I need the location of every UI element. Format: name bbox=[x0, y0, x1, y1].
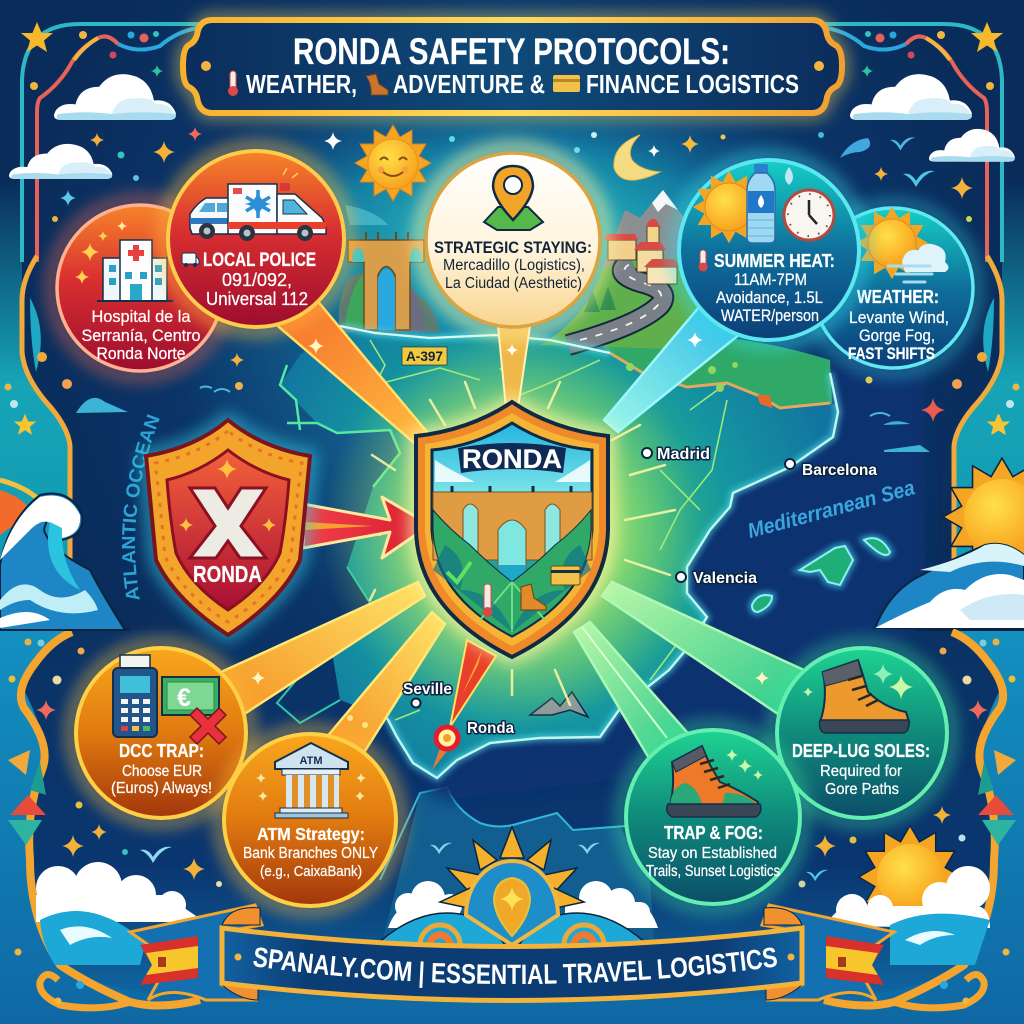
stars and clouds top bbox=[9, 22, 1015, 452]
flag of Spain right bbox=[826, 936, 884, 985]
label: Seville: Seville bbox=[403, 681, 452, 698]
flag of Spain bbox=[140, 936, 198, 985]
text: hospital: Serranía, Centro bbox=[82, 327, 200, 345]
decorative frame: right bbox=[824, 24, 1020, 1008]
panel: summer heat bbox=[675, 156, 863, 344]
map: Balearic islands glow bbox=[752, 538, 890, 612]
title line 1: RONDA SAFETY PROTOCOLS: bbox=[293, 31, 730, 72]
icon: clock bbox=[784, 190, 834, 240]
text: ATM strategy: Bank Branches ONLY bbox=[243, 845, 378, 862]
beam: ATM to shield bbox=[320, 612, 445, 762]
label: Madrid: Madrid bbox=[657, 446, 710, 463]
sun with smiling face bbox=[355, 125, 431, 201]
panel: DCC trap bbox=[72, 644, 250, 822]
right sun, clouds and waves bbox=[875, 414, 1024, 628]
text: trap and fog: Trails, Sunset Logistics bbox=[646, 863, 780, 880]
text: DCC trap: (Euros) Always! bbox=[111, 780, 212, 797]
red pointer to Ronda marker bbox=[450, 640, 496, 727]
map: Pyrenees border bbox=[610, 353, 830, 408]
panel: trap and fog bbox=[622, 726, 804, 908]
text: DCC trap bbox=[111, 741, 212, 797]
text: weather bbox=[848, 287, 949, 363]
X shield label: RONDA bbox=[193, 561, 262, 587]
crest: bridge bbox=[433, 460, 592, 585]
crest: check mark bbox=[447, 562, 471, 582]
icon: mini ambulance bbox=[182, 253, 199, 267]
map: Mediterranean sea area bbox=[400, 360, 925, 800]
map: Portugal outline bbox=[277, 567, 370, 723]
subtitle: weather: WEATHER, bbox=[246, 69, 357, 99]
text: weather: Gorge Fog, bbox=[859, 326, 935, 345]
text: summer heat: 11AM-7PM bbox=[734, 270, 807, 289]
text: deep-lug soles: Required for bbox=[820, 763, 903, 780]
icon: boot bbox=[366, 74, 388, 95]
text: deep-lug soles: DEEP-LUG SOLES: bbox=[792, 741, 930, 761]
bottom centre sun emblem bbox=[376, 827, 658, 965]
beam: trap and fog to shield bbox=[574, 622, 700, 770]
text: strategic staying: La Ciudad (Aesthetic) bbox=[445, 275, 582, 292]
subtitle: adventure: ADVENTURE & bbox=[393, 69, 545, 99]
text: ATM strategy: (e.g., CaixaBank) bbox=[260, 863, 362, 880]
beam: DCC trap to shield bbox=[208, 582, 425, 724]
text: trap and fog: Stay on Established bbox=[648, 845, 777, 862]
north coast glowing line bbox=[340, 326, 610, 353]
crest: name banner: RONDA bbox=[462, 444, 562, 474]
icon: sun, cloud and wind bbox=[856, 207, 948, 282]
label: Atlantic Ocean: ATLANTIC OCCEAN bbox=[122, 414, 160, 600]
text: local police bbox=[203, 250, 316, 309]
text: ATM strategy: ATM Strategy: bbox=[257, 824, 365, 844]
crest: thermometer bbox=[482, 584, 492, 617]
ribbon tail right bbox=[762, 905, 894, 1000]
icon: police car and ambulance bbox=[190, 168, 326, 241]
bottom banner ribbon bbox=[126, 903, 898, 1003]
panel: local police bbox=[164, 147, 348, 331]
text: summer heat: WATER/person bbox=[721, 307, 819, 325]
text: local police: 091/092, bbox=[222, 270, 292, 290]
label: road A-397: A-397 bbox=[406, 349, 443, 364]
crest: green hills bbox=[433, 510, 591, 636]
label: road A-397 bbox=[402, 347, 447, 365]
panel: strategic staying bbox=[421, 148, 605, 332]
text: local police: LOCAL POLICE bbox=[203, 250, 316, 271]
label: Barcelona: Barcelona bbox=[802, 462, 877, 479]
label: Ronda marker bbox=[432, 720, 514, 770]
shield: X Ronda bbox=[146, 420, 310, 635]
map labels bbox=[79, 320, 958, 810]
icon: water drop bbox=[785, 167, 793, 185]
left waves and setting sun bbox=[0, 480, 125, 630]
text: trap and fog: TRAP & FOG: bbox=[664, 823, 763, 843]
map of Spain bbox=[277, 326, 925, 950]
label: Ronda marker: Ronda bbox=[467, 720, 514, 737]
text: weather: FAST SHIFTS bbox=[848, 345, 935, 363]
panel: weather bbox=[809, 204, 977, 372]
text: summer heat: SUMMER HEAT: bbox=[714, 251, 835, 271]
beam: summer heat to shield bbox=[604, 300, 745, 432]
map: coastline bbox=[387, 373, 838, 778]
icon: bank ATM: ATM bbox=[299, 755, 323, 767]
icon: euro note: € bbox=[177, 684, 191, 712]
panel: deep-lug soles bbox=[773, 644, 951, 822]
text: weather: Levante Wind, bbox=[849, 308, 949, 327]
label: Mediterranean Sea: Mediterranean Sea bbox=[745, 476, 918, 543]
text: deep-lug soles: Gore Paths bbox=[825, 781, 899, 798]
crescent moon bbox=[614, 135, 660, 180]
text: hospital: Ronda Norte bbox=[96, 345, 186, 363]
map: Balearic islands bbox=[752, 538, 890, 612]
text: summer heat: Avoidance, 1.5L bbox=[716, 289, 823, 307]
title banner bbox=[183, 20, 842, 113]
X mark bbox=[190, 488, 266, 558]
text: hospital bbox=[82, 308, 200, 363]
map: glowing dots bbox=[626, 362, 738, 392]
icon: hiking boot bbox=[803, 660, 913, 733]
label: Barcelona bbox=[785, 459, 877, 479]
icon: bank ATM bbox=[256, 743, 366, 818]
text: hospital: Hospital de la bbox=[92, 308, 191, 326]
text: summer heat bbox=[714, 251, 835, 325]
beam: deep-lug soles to shield bbox=[602, 582, 817, 722]
crest: credit card bbox=[551, 566, 580, 585]
icon: card terminal bbox=[113, 655, 157, 737]
text: DCC trap: DCC TRAP: bbox=[119, 741, 204, 761]
panel: ATM strategy bbox=[220, 730, 400, 910]
text: strategic staying: STRATEGIC STAYING: bbox=[434, 238, 592, 257]
text: DCC trap: Choose EUR bbox=[122, 763, 202, 780]
label: Valencia: Valencia bbox=[693, 570, 757, 587]
icon: thermometer bbox=[228, 71, 238, 96]
bottom-left clouds and waves bbox=[36, 802, 222, 965]
map: North Africa coast bbox=[380, 787, 640, 880]
panel: hospital bbox=[52, 200, 228, 376]
map: mountain bbox=[530, 692, 588, 717]
radial light rays around central shield bbox=[322, 330, 702, 730]
arrow: shield to central shield bbox=[303, 497, 430, 558]
icon: sun bbox=[693, 171, 765, 243]
subtitle: finance: FINANCE LOGISTICS bbox=[586, 69, 799, 99]
icon: euro note bbox=[162, 677, 219, 715]
map: region borders bbox=[370, 340, 727, 720]
icon: red cross bbox=[190, 708, 226, 744]
icon: map pin bbox=[484, 166, 543, 230]
label: Seville bbox=[403, 681, 452, 708]
beam: police to shield bbox=[265, 292, 432, 448]
icon: card bbox=[553, 75, 580, 92]
central Ronda shield bbox=[416, 402, 608, 657]
text: local police: Universal 112 bbox=[206, 289, 308, 309]
icon: water bottle bbox=[747, 164, 775, 243]
map: coast glow bbox=[387, 373, 838, 778]
ribbon tail left bbox=[130, 905, 262, 1000]
text: strategic staying bbox=[434, 238, 592, 292]
decorative frame: left bbox=[4, 24, 200, 1008]
icon: hospital building bbox=[75, 221, 173, 301]
map: Iberian landmass bbox=[280, 326, 838, 778]
landscape left: gorge and bridge bbox=[339, 205, 440, 332]
map: north-west coast bbox=[280, 365, 400, 487]
icon: thermometer bbox=[698, 250, 708, 272]
crest: boot bbox=[521, 584, 546, 610]
text: strategic staying: Mercadillo (Logistics), bbox=[443, 257, 585, 274]
map: France green area bbox=[600, 335, 832, 408]
beam: strategic staying to shield bbox=[498, 326, 530, 408]
landscape right: hills, village and road bbox=[540, 190, 708, 350]
bottom-right sun, clouds and waves bbox=[798, 806, 990, 965]
map: North Africa bbox=[380, 787, 655, 950]
text: deep-lug soles bbox=[792, 741, 930, 798]
text: ATM strategy bbox=[243, 824, 378, 880]
icon: hiking boot green bbox=[667, 746, 763, 817]
banner text: SPANALY.COM | ESSENTIAL TRAVEL LOGISTICS bbox=[253, 948, 777, 988]
sky glow behind landscape bbox=[200, 90, 840, 390]
text: weather: WEATHER: bbox=[857, 287, 939, 307]
text: trap and fog bbox=[646, 823, 780, 880]
